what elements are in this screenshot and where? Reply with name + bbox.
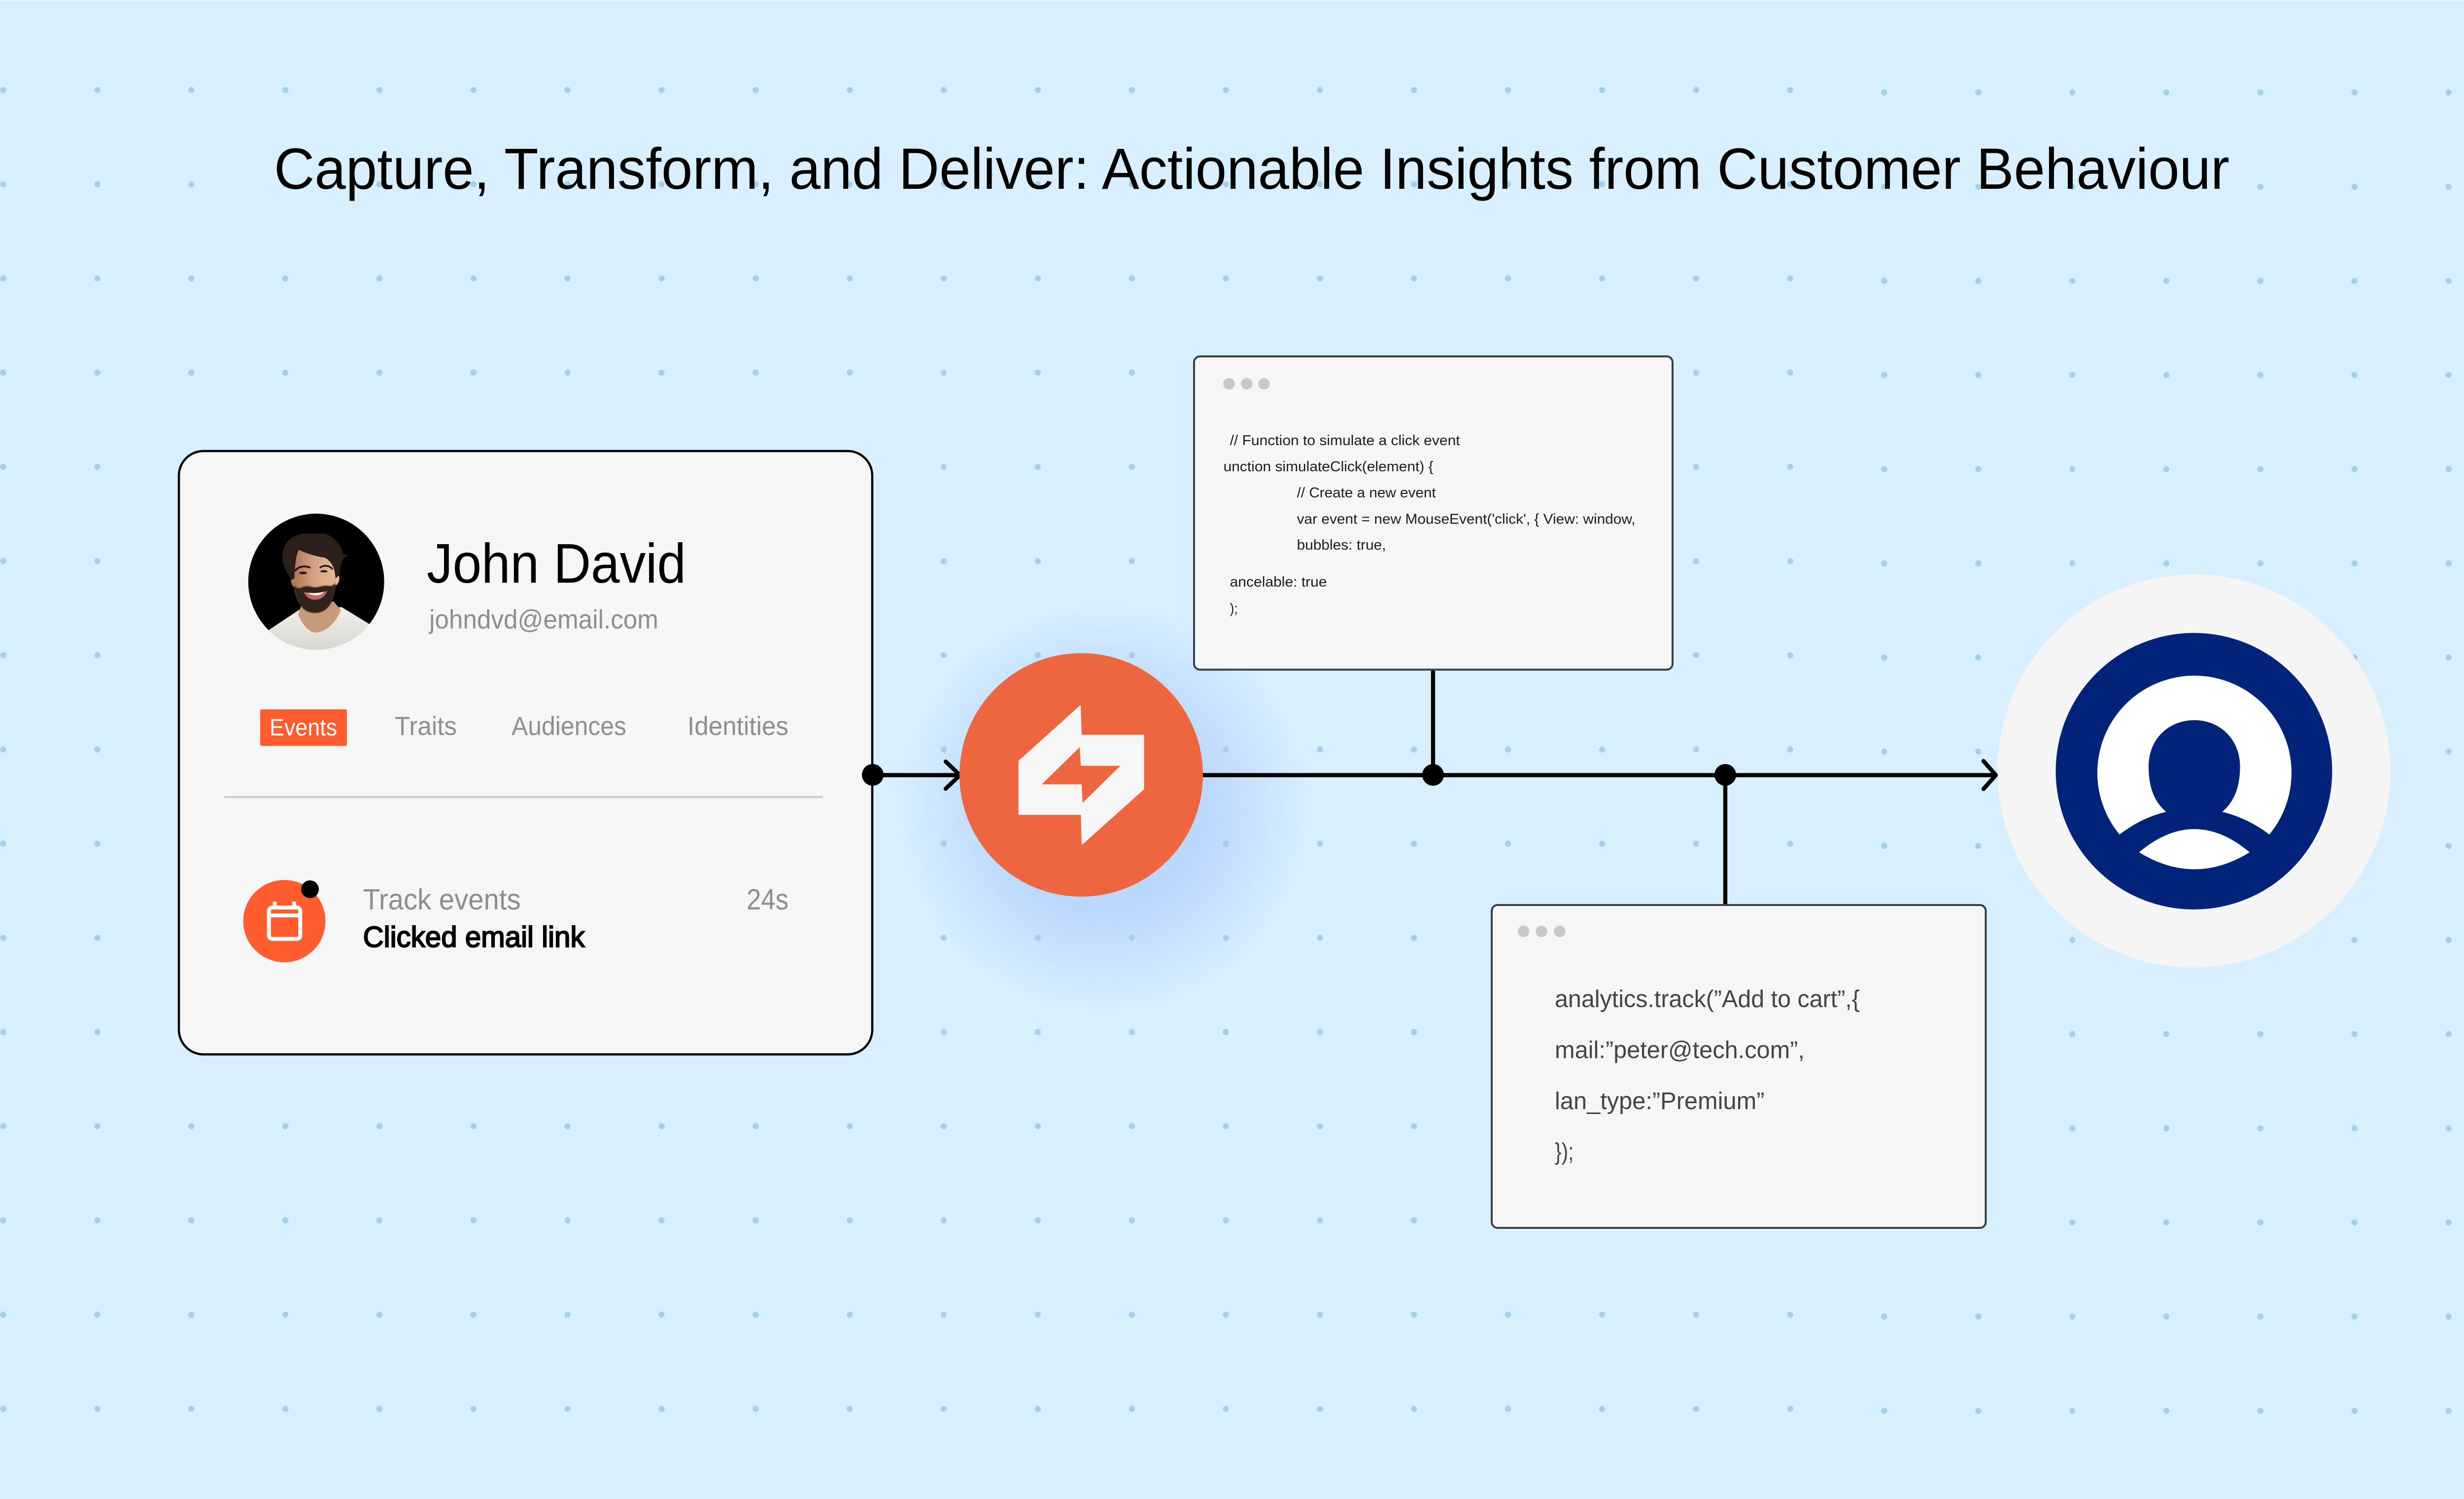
connector node: card xyxy=(862,764,884,786)
tab: Events active xyxy=(260,709,347,746)
code text: ancelable: true xyxy=(1230,574,1327,590)
tab: Audiences: Audiences xyxy=(512,712,626,741)
code text: // Create a new event xyxy=(1297,485,1436,501)
name: John David xyxy=(427,532,686,594)
tab: Identities: Identities xyxy=(687,712,788,741)
connector node: upper window xyxy=(1422,764,1444,786)
icon: profile photo xyxy=(248,514,384,651)
tab: Traits: Traits xyxy=(395,712,457,741)
panel: upper code window xyxy=(1194,356,1673,669)
code text xyxy=(1224,433,1636,617)
event time: 24s xyxy=(747,883,788,916)
logo circle xyxy=(959,653,1203,897)
panel: customer profile card xyxy=(179,451,872,1054)
title: Capture, Transform, and Deliver: Actionable Insights from Customer Behaviour xyxy=(274,137,2229,202)
code text: // Function to simulate a click event xyxy=(1230,433,1460,449)
code text: analytics.track(”Add to cart”,{ xyxy=(1555,986,1860,1012)
code text: var event = new MouseEvent('click', { View: window, xyxy=(1297,512,1636,527)
arrow head: into logo xyxy=(946,762,960,789)
icon: calendar badge xyxy=(243,880,325,962)
connector node: lower window xyxy=(1714,764,1736,786)
panel: lower code window xyxy=(1492,905,1986,1228)
connector line: card to logo xyxy=(873,773,960,777)
tab: Events active: Events xyxy=(270,715,337,741)
connector: upper code window stem xyxy=(1431,669,1435,775)
code text: bubbles: true, xyxy=(1297,537,1386,553)
arrow head: into customer xyxy=(1984,761,1996,789)
window dots xyxy=(1223,378,1270,389)
code text: unction simulateClick(element) { xyxy=(1224,459,1434,475)
event label: Track events xyxy=(363,883,521,916)
icon: customer avatar xyxy=(1998,575,2390,967)
icon: logo mark xyxy=(1019,706,1144,844)
code text: }); xyxy=(1555,1139,1574,1165)
code text xyxy=(1555,986,1860,1165)
code text: ); xyxy=(1230,601,1238,617)
email: johndvd@email.com xyxy=(428,605,658,634)
window dots xyxy=(1518,926,1566,937)
connector: lower code window stem xyxy=(1723,775,1727,905)
event name: Clicked email link xyxy=(363,921,585,953)
code text: lan_type:”Premium” xyxy=(1555,1088,1764,1115)
code text: mail:”peter@tech.com”, xyxy=(1555,1037,1805,1064)
connector line: logo to customer xyxy=(1203,773,1996,777)
